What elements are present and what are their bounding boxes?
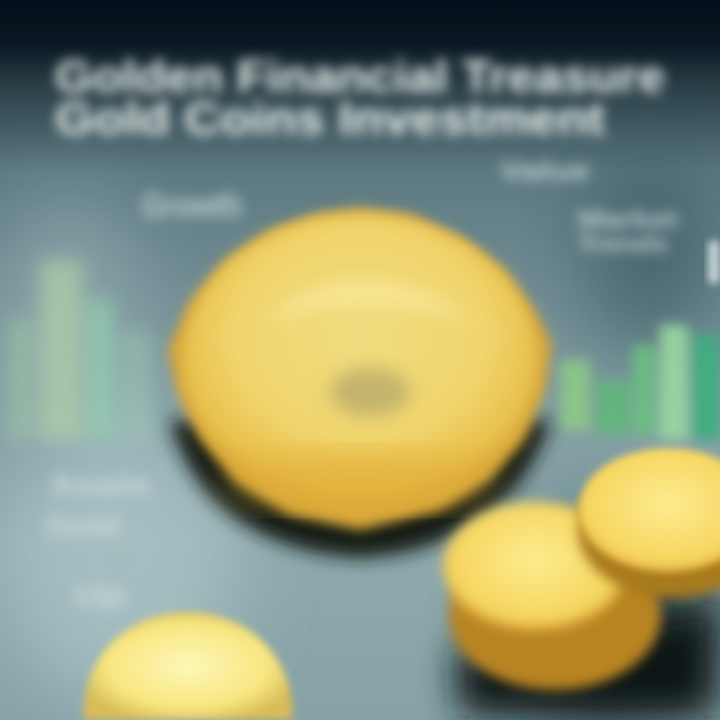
coin: far right xyxy=(578,448,720,598)
coin: bottom left xyxy=(84,612,292,720)
coin: stacked shadow xyxy=(455,600,715,715)
main coin shadow xyxy=(170,420,550,558)
main gold coin xyxy=(168,208,552,530)
small blurred labels: Market xyxy=(578,204,678,234)
bar chart: left xyxy=(8,260,152,440)
title xyxy=(55,51,665,144)
small blurred labels xyxy=(45,155,678,612)
bar chart: right xyxy=(560,325,720,440)
small blurred labels: Up xyxy=(75,579,125,612)
icon: right edge mark xyxy=(708,240,720,284)
small blurred labels: Trends xyxy=(578,231,668,258)
title: Golden Financial Treasure xyxy=(55,51,665,102)
small blurred labels: Assets xyxy=(50,469,150,502)
title: Gold Coins Investment xyxy=(55,93,605,144)
small blurred labels: Gold xyxy=(45,510,120,541)
small blurred labels: Value xyxy=(500,155,590,186)
coin: lower right xyxy=(443,502,661,690)
small blurred labels: Growth xyxy=(142,187,242,225)
